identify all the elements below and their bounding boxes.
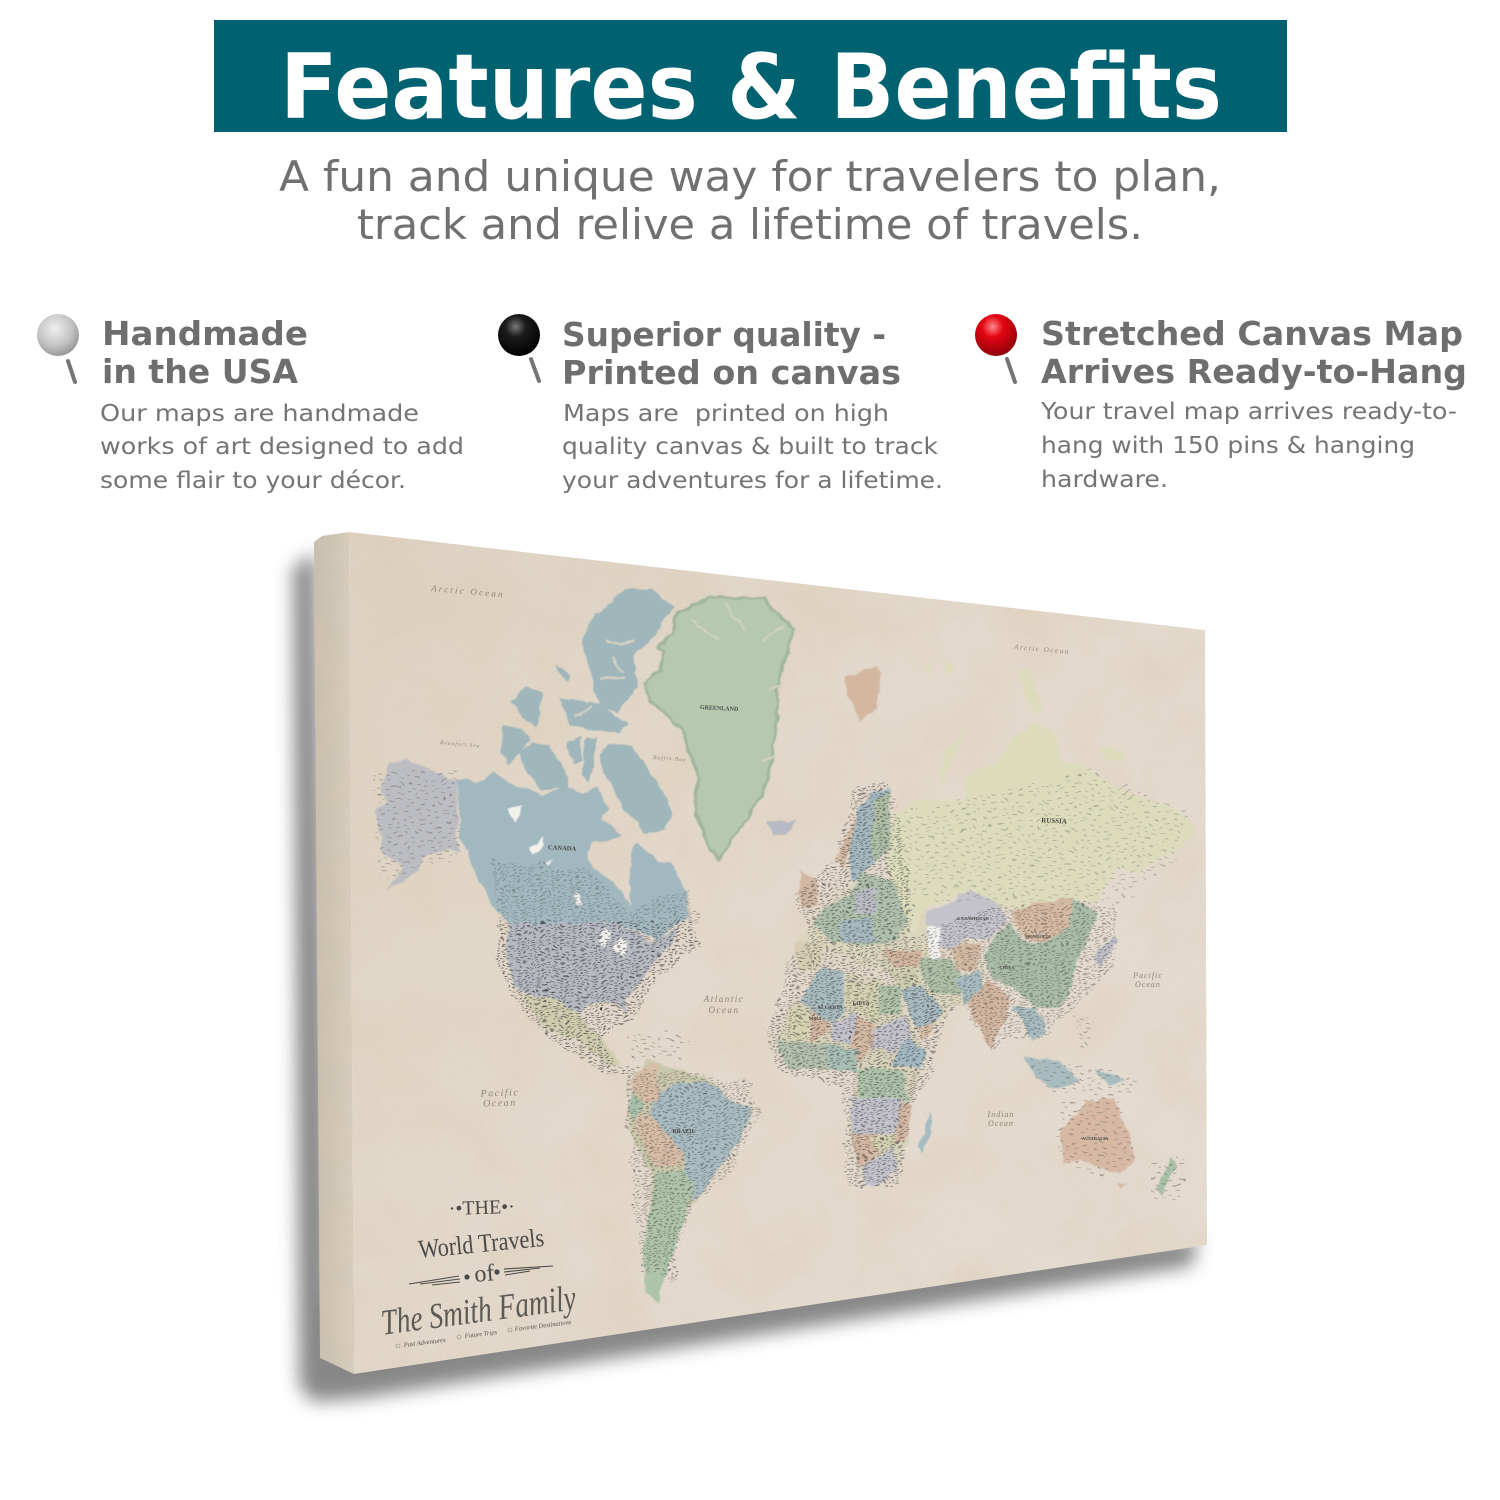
- dense north america labels: [495, 920, 700, 1075]
- body text: works of art designed to add: [100, 434, 464, 460]
- legend: Past Adventures: [402, 1337, 446, 1349]
- country and ocean labels: Arctic Ocean: [1013, 643, 1070, 656]
- europe and africa labels: [765, 785, 947, 1187]
- alaska: [375, 760, 460, 890]
- south america: [627, 1060, 753, 1303]
- heading: [102, 314, 308, 391]
- svalbard: [847, 665, 882, 720]
- eurasia africa oceania: [767, 661, 1197, 1195]
- body text: [562, 401, 943, 494]
- country and ocean labels: KAZAKHSTAN: [957, 916, 990, 921]
- heading: Arrives Ready-to-Hang: [1041, 352, 1467, 391]
- arctic islands: [502, 588, 673, 835]
- subtitle: A fun and unique way for travelers to plan,: [279, 152, 1221, 201]
- city label clusters: [372, 770, 1190, 1280]
- body text: hardware.: [1041, 467, 1168, 493]
- country and ocean labels: Ocean: [483, 1097, 517, 1110]
- russia labels: [893, 770, 1190, 905]
- country and ocean labels: [430, 583, 1163, 1141]
- country and ocean labels: RUSSIA: [1041, 816, 1067, 826]
- country and ocean labels: Ocean: [1135, 980, 1161, 989]
- of with flourishes: of: [473, 1260, 495, 1288]
- russia: [887, 722, 1197, 934]
- caribbean labels: [625, 1030, 690, 1060]
- africa: [777, 967, 933, 1187]
- africa base: [777, 967, 927, 1187]
- legend: Future Trips: [463, 1329, 498, 1340]
- china: [983, 897, 1097, 1008]
- usa: [505, 922, 680, 1015]
- india: [967, 979, 1010, 1052]
- australia: [1060, 1097, 1137, 1189]
- feature: superior quality: [498, 314, 943, 494]
- europe: [793, 787, 907, 971]
- middle east and central asia: [882, 942, 983, 1040]
- subtitle: [279, 152, 1221, 249]
- body text: Maps are printed on high: [563, 401, 889, 427]
- country and ocean labels: GREENLAND: [700, 705, 739, 713]
- heading: Superior quality -: [562, 315, 886, 354]
- europe and middle east base: [793, 881, 987, 1028]
- title banner: Features & Benefits: [280, 35, 1222, 140]
- new zealand: [1157, 1159, 1177, 1195]
- legend: [396, 1319, 572, 1349]
- mongolia: [1010, 897, 1073, 942]
- alaska labels: [372, 770, 460, 880]
- canvas map: [310, 525, 1215, 1380]
- body text: your adventures for a lifetime.: [562, 468, 943, 494]
- arctic russian islands: [922, 661, 1127, 787]
- country and ocean labels: ALGERIA: [817, 1005, 843, 1011]
- icon: black map pin: [498, 314, 540, 381]
- heading: Printed on canvas: [562, 353, 901, 392]
- country and ocean labels: Ocean: [708, 1005, 740, 1015]
- icon: red map pin: [975, 314, 1017, 382]
- canvas drop shadow: [293, 552, 1198, 1402]
- the: ·•THE•·: [448, 1196, 515, 1220]
- body text: Our maps are handmade: [100, 401, 419, 427]
- country and ocean labels: MONGOLIA: [1025, 934, 1052, 939]
- world map land masses: [375, 588, 1197, 1303]
- body text: [100, 401, 464, 494]
- country and ocean labels: LIBYA: [853, 1001, 869, 1007]
- heading: Handmade: [102, 314, 308, 353]
- country and ocean labels: Pacific: [479, 1087, 520, 1100]
- family name: The Smith Family: [379, 1277, 578, 1343]
- icon: silver map pin: [37, 314, 79, 382]
- map title block: [379, 1196, 578, 1349]
- country and ocean labels: Arctic Ocean: [430, 583, 505, 599]
- north america: [375, 588, 690, 1067]
- feature: stretched canvas: [975, 314, 1467, 493]
- body text: [1040, 399, 1457, 493]
- body text: quality canvas & built to track: [562, 434, 939, 460]
- country and ocean labels: CANADA: [548, 844, 577, 853]
- country and ocean labels: Atlantic: [703, 994, 744, 1004]
- heading: [1041, 314, 1467, 391]
- country and ocean labels: AUSTRALIA: [1082, 1136, 1109, 1141]
- country and ocean labels: Ocean: [988, 1119, 1014, 1128]
- subtitle: track and relive a lifetime of travels.: [357, 200, 1143, 249]
- heading: [562, 315, 901, 392]
- canada labels: [490, 860, 700, 925]
- canvas front: [349, 532, 1207, 1374]
- canada: [457, 773, 690, 940]
- south america labels: [625, 1065, 760, 1280]
- country and ocean labels: BRAZIL: [672, 1129, 696, 1135]
- greenland: [645, 597, 793, 860]
- australia and new zealand labels: [1057, 1095, 1185, 1200]
- indonesia and philippines labels: [1025, 1015, 1147, 1095]
- country and ocean labels: Baffin Bay: [653, 754, 687, 763]
- heading: Stretched Canvas Map: [1041, 314, 1463, 353]
- country and ocean labels: Pacific: [1132, 971, 1163, 980]
- asia labels: [905, 905, 1117, 1052]
- kazakhstan: [927, 889, 1007, 950]
- heading: in the USA: [102, 352, 298, 391]
- body text: Your travel map arrives ready-to-: [1040, 399, 1457, 425]
- arctic channels: [575, 642, 635, 715]
- south east asia: [1013, 934, 1127, 1089]
- body text: some flair to your décor.: [100, 468, 406, 494]
- paper texture: [310, 525, 1215, 1380]
- country and ocean labels: Beaufort Sea: [440, 739, 481, 750]
- feature: handmade in the USA: [37, 314, 464, 494]
- mexico and central america: [520, 992, 620, 1067]
- canvas side edge: [314, 532, 354, 1374]
- lakes: [507, 806, 628, 956]
- caspian and aral: [927, 926, 940, 961]
- of with flourishes: [409, 1260, 553, 1288]
- body text: hang with 150 pins & hanging: [1041, 433, 1415, 459]
- world travels: World Travels: [417, 1223, 545, 1264]
- country and ocean labels: Indian: [987, 1110, 1014, 1119]
- iceland: [767, 820, 797, 836]
- country and ocean labels: CHINA: [999, 965, 1015, 970]
- country and ocean labels: MALI: [809, 1016, 821, 1021]
- legend: Favorite Destinations: [513, 1319, 572, 1333]
